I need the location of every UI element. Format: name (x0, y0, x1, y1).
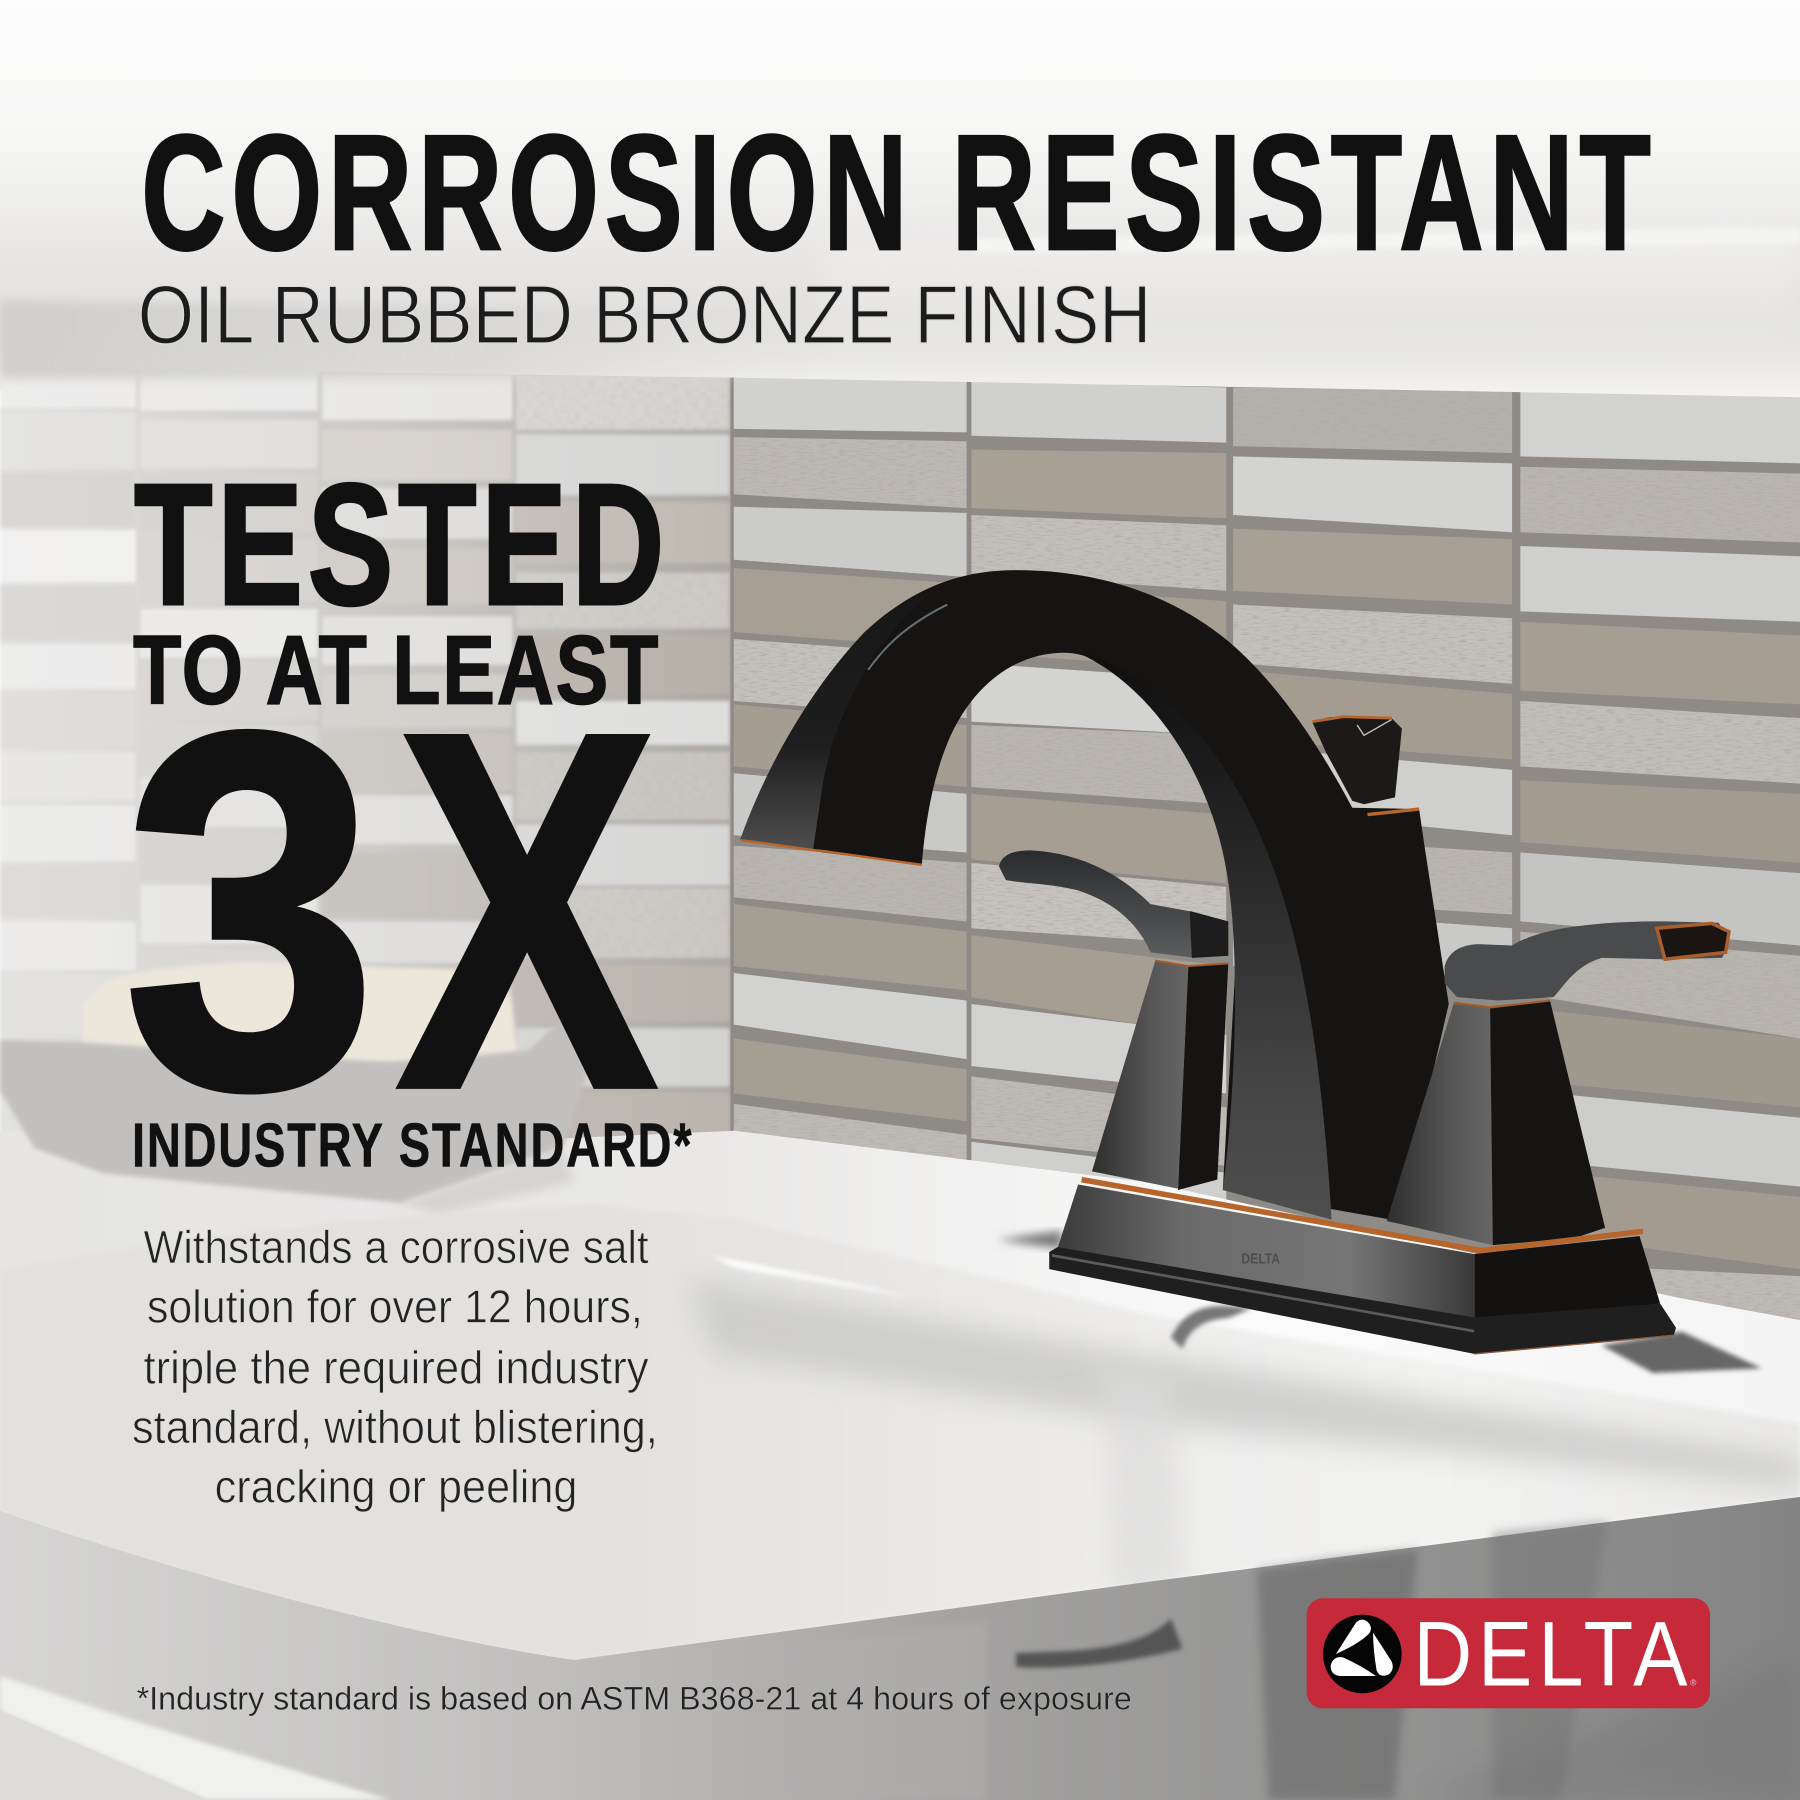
tested heading: TESTED (134, 449, 669, 641)
countertop (0, 1131, 1800, 1800)
right handle base (1387, 1001, 1605, 1245)
faucet (741, 570, 1729, 1354)
logo emblem (1323, 1615, 1402, 1693)
big 3X figure (123, 627, 660, 1194)
registered mark: ® (1690, 1677, 1697, 1687)
description text: Withstands a corrosive salt (143, 1221, 649, 1273)
footnote: *Industry standard is based on ASTM B368-21 at 4 hours of exposure (137, 1680, 1132, 1716)
white wash over left tiles (0, 363, 731, 1155)
left handle base (1092, 961, 1228, 1190)
soap dish (0, 1019, 591, 1215)
right handle (1445, 921, 1729, 1001)
industry standard label: INDUSTRY STANDARD* (132, 1111, 693, 1180)
logo wordmark: DELTA (1413, 1604, 1693, 1706)
spout highlight (868, 605, 947, 670)
ledge lower edge (0, 310, 1800, 397)
spout and body (741, 570, 1449, 1221)
faucet shadows (996, 1231, 1762, 1373)
spout left face (741, 591, 934, 850)
deck logo text: DELTA (1241, 1251, 1280, 1268)
center panel (1078, 653, 1332, 1220)
sink basin (0, 1205, 1800, 1660)
tiled backsplash: right section (730, 374, 1800, 1338)
Delta logo (1307, 1598, 1710, 1708)
big 3X figure: X (396, 627, 660, 1194)
body copper edge (1367, 809, 1419, 815)
spout copper edge (741, 840, 922, 865)
description text: solution for over 12 hours, (147, 1280, 643, 1332)
description text: standard, without blistering, (132, 1401, 658, 1453)
left handle (999, 850, 1228, 958)
upper wall (0, 0, 1800, 396)
description text (132, 1221, 658, 1513)
soft shaded band left of ledge (0, 301, 827, 381)
subtitle: OIL RUBBED BRONZE FINISH (138, 268, 1151, 361)
mirror reflection below basin edge (0, 1497, 1800, 1800)
to at least heading: TO AT LEAST (133, 616, 660, 725)
description text: triple the required industry (143, 1341, 649, 1393)
description text: cracking or peeling (215, 1461, 577, 1513)
soap (83, 962, 519, 1062)
valve knob (1312, 717, 1402, 804)
tiled backsplash: left washed section (0, 367, 763, 1166)
deck plate (1049, 1180, 1676, 1354)
big 3X figure: 3 (123, 627, 378, 1194)
